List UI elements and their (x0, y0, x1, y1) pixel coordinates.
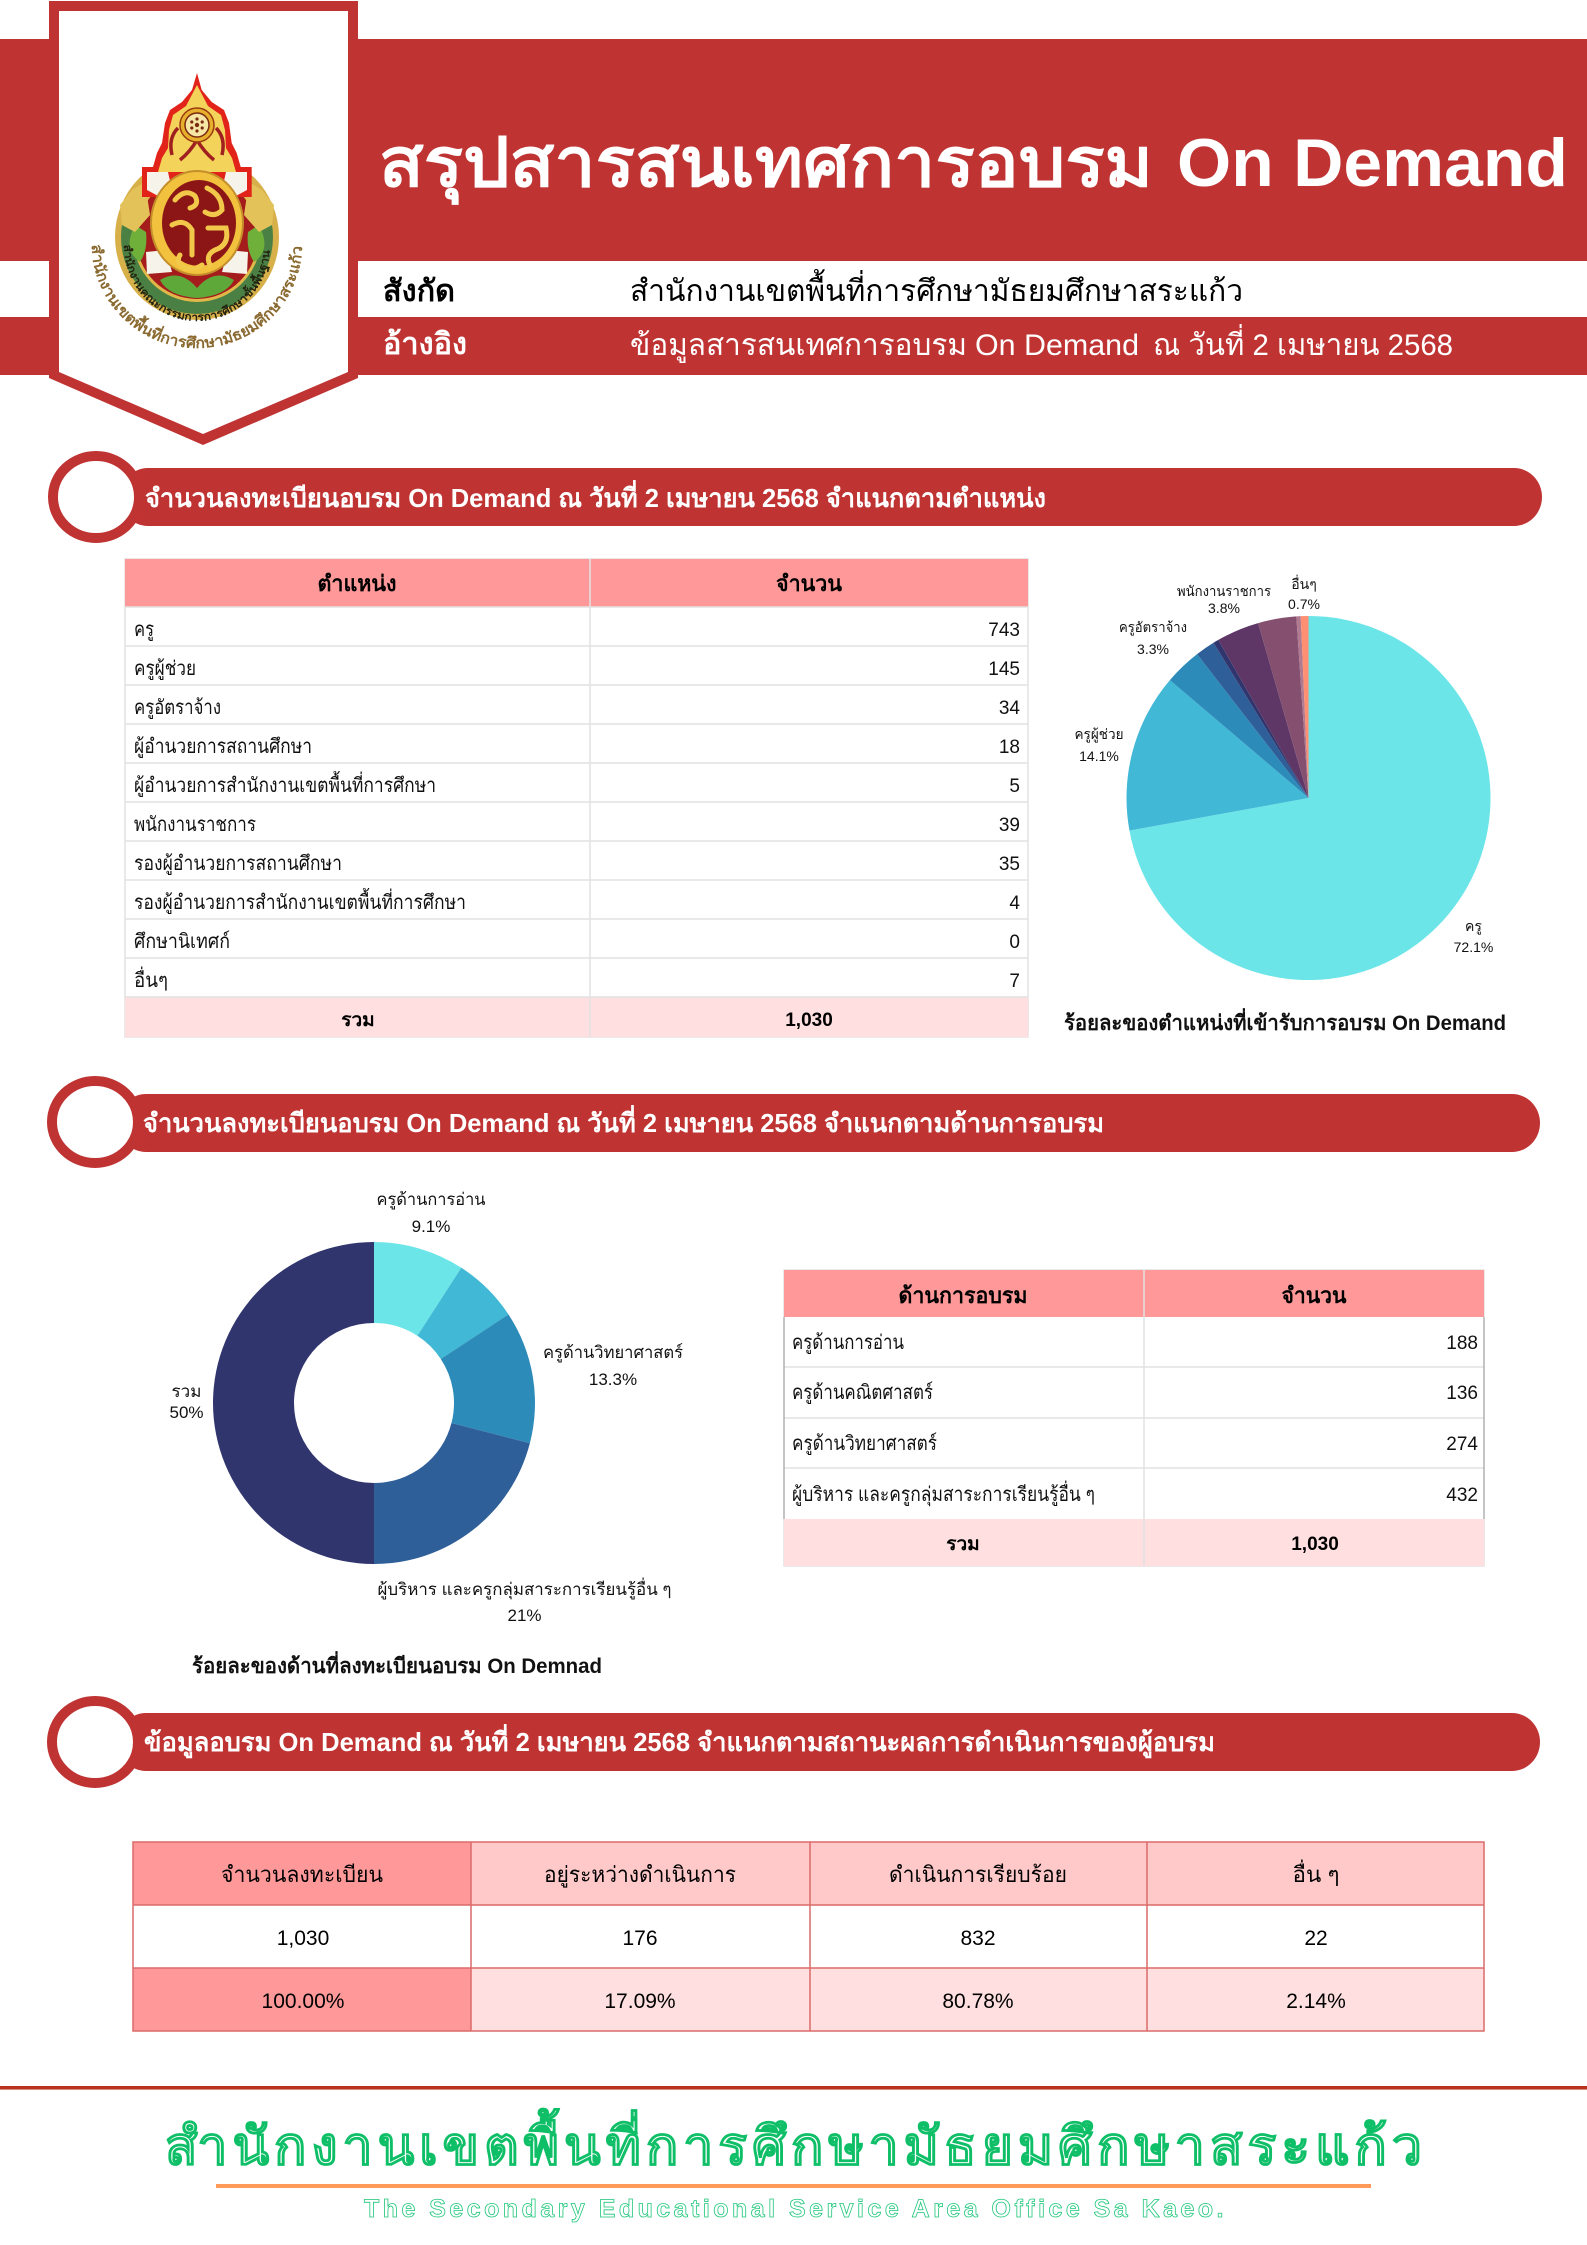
table: training status summary: 80.78% (942, 1990, 1014, 2013)
table: registrations by training area: ครูด้านการอ่าน (792, 1332, 904, 1355)
footer divider (216, 2184, 1371, 2188)
table: registrations by position: 39 (999, 815, 1020, 836)
table: training status summary: 1,030 (277, 1927, 329, 1950)
table: registrations by position: 35 (999, 854, 1020, 875)
pie chart: share by position: ครูผู้ช่วย (1074, 726, 1124, 743)
table: registrations by position: ผู้อำนวยการสถานศึกษา (134, 736, 312, 759)
table: registrations by training area: รวม (946, 1534, 980, 1555)
table: registrations by position: 34 (999, 698, 1020, 719)
donut chart: share by training area: ผู้บริหาร และครูกลุ่มสาระการเรียนรู้อื่น ๆ (378, 1577, 672, 1600)
table: registrations by position: รวม (341, 1010, 375, 1031)
donut chart caption: ร้อยละของด้านที่ลงทะเบียนอบรม On Demnad (192, 1650, 602, 1678)
subtitle: affiliation value: สำนักงานเขตพื้นที่การศึกษามัธยมศึกษาสระแก้ว (630, 269, 1243, 308)
table: registrations by position: ผู้อำนวยการสำนักงานเขตพื้นที่การศึกษา (134, 771, 436, 798)
pie chart: share by position: 0.7% (1288, 596, 1320, 612)
pie chart: share by position: อื่นๆ (1291, 575, 1317, 592)
table: registrations by position: ครูผู้ช่วย (134, 658, 196, 681)
icon: school emblem (92, 73, 302, 348)
table: registrations by position: 18 (999, 737, 1020, 758)
title: On Demand (1177, 125, 1568, 201)
footer: organisation name: สำนักงานเขตพื้นที่การศึกษามัธยมศึกษาสระแก้ว (165, 2108, 1427, 2176)
pie chart: share by position (1074, 575, 1493, 980)
table: registrations by position: 0 (1009, 932, 1020, 953)
table: registrations by position: 5 (1009, 776, 1020, 797)
pie chart: share by position: 3.8% (1208, 600, 1240, 616)
table: training status summary: 22 (1304, 1927, 1328, 1950)
table: registrations by position: ตำแหน่ง (318, 571, 396, 596)
table: registrations by training area: 1,030 (1291, 1534, 1339, 1555)
table: registrations by training area: 136 (1446, 1383, 1478, 1404)
table: training status summary (133, 1842, 1484, 2031)
donut chart: share by training area: 50% (169, 1403, 204, 1422)
subtitle: reference value: On Demand (975, 329, 1139, 362)
section header 2 (52, 1081, 1540, 1163)
table: registrations by position (125, 559, 1028, 1037)
table: registrations by position: พนักงานราชการ (134, 814, 256, 836)
table: registrations by position: ครูอัตราจ้าง (134, 697, 221, 720)
table: registrations by position: 743 (988, 620, 1020, 641)
table: registrations by position: 145 (988, 659, 1020, 680)
title (379, 125, 1568, 205)
table: training status summary: อยู่ระหว่างดำเนินการ (544, 1862, 736, 1888)
pie chart: share by position: 3.3% (1137, 641, 1169, 657)
icon: school emblem: สำนักงานคณะกรรมการการศึกษาขั้นพื้นฐาน (124, 245, 270, 322)
section header 3: ข้อมูลอบรม On Demand ณ วันที่ 2 เมษายน 2568 จำแนกตามสถานะผลการดำเนินการของผู้อบรม (144, 1723, 1215, 1759)
table: registrations by position: ศึกษานิเทศก์ (134, 930, 230, 953)
table: registrations by position: ครู (134, 619, 154, 642)
section header 1 (53, 456, 1542, 538)
table: training status summary: อื่น ๆ (1292, 1859, 1340, 1887)
pie chart caption: ร้อยละของตำแหน่งที่เข้ารับการอบรม On Demand (1064, 1007, 1506, 1035)
donut chart: share by training area: 21% (507, 1606, 542, 1625)
donut chart: share by training area: ครูด้านวิทยาศาสตร์ (543, 1343, 683, 1363)
table: registrations by training area: ครูด้านคณิตศาสตร์ (792, 1381, 933, 1405)
donut chart: share by training area: ครูด้านการอ่าน (376, 1190, 486, 1210)
pie chart: share by position: ครูอัตราจ้าง (1119, 619, 1187, 636)
table: registrations by training area: จำนวน (1282, 1283, 1346, 1308)
table: registrations by training area: ผู้บริหาร และครูกลุ่มสาระการเรียนรู้อื่น ๆ (792, 1480, 1095, 1507)
table: registrations by training area: 274 (1446, 1434, 1478, 1455)
table: registrations by training area: ด้านการอบรม (898, 1283, 1028, 1308)
donut chart: share by training area: 9.1% (412, 1217, 450, 1236)
table: registrations by position: รองผู้อำนวยการสำนักงานเขตพื้นที่การศึกษา (134, 888, 466, 915)
table: registrations by position: อื่นๆ (134, 966, 168, 992)
subtitle: reference value: ข้อมูลสารสนเทศการอบรม (630, 329, 967, 363)
donut chart: share by training area: 13.3% (589, 1370, 637, 1389)
table: training status summary: 2.14% (1286, 1990, 1346, 2013)
table: training status summary: 100.00% (262, 1990, 344, 2013)
header band (0, 39, 1587, 375)
pie chart: share by position: 72.1% (1454, 939, 1493, 955)
footer: English name: The Secondary Educational Service Area Office Sa Kaeo. (364, 2195, 1227, 2223)
table: registrations by training area: ครูด้านวิทยาศาสตร์ (792, 1432, 937, 1456)
subtitle: reference value: ณ วันที่ 2 เมษายน 2568 (1153, 324, 1453, 362)
table: training status summary: 176 (622, 1927, 658, 1950)
footer rule (0, 2086, 1587, 2090)
table: registrations by training area: 432 (1446, 1485, 1478, 1506)
table: registrations by position: จำนวน (776, 571, 842, 596)
table: training status summary: ดำเนินการเรียบร้อย (889, 1862, 1067, 1887)
pie chart: share by position: 14.1% (1079, 748, 1119, 764)
subtitle: reference label: อ้างอิง (383, 328, 467, 361)
section header 3 (52, 1701, 1540, 1783)
title: สรุปสารสนเทศการอบรม (379, 125, 1153, 205)
table: registrations by position: 1,030 (785, 1010, 833, 1031)
ribbon badge (49, 1, 358, 445)
subtitle: reference value (630, 324, 1453, 363)
subtitle: affiliation label: สังกัด (383, 275, 455, 308)
donut chart: share by training area (169, 1190, 683, 1625)
table: registrations by position: 7 (1009, 971, 1020, 992)
icon: school emblem: สำนักงานเขตพื้นที่การศึกษามัธยมศึกษาสระแก้ว (92, 244, 302, 348)
section header 2: จำนวนลงทะเบียนอบรม On Demand ณ วันที่ 2 เมษายน 2568 จำแนกตามด้านการอบรม (143, 1104, 1104, 1138)
table: registrations by position: รองผู้อำนวยการสถานศึกษา (134, 853, 342, 876)
table: training status summary: จำนวนลงทะเบียน (221, 1862, 383, 1887)
table: registrations by position: 4 (1009, 893, 1020, 914)
table: registrations by training area: 188 (1446, 1333, 1478, 1354)
table: registrations by training area (784, 1270, 1484, 1566)
table: training status summary: 832 (960, 1927, 996, 1950)
pie chart: share by position: พนักงานราชการ (1177, 583, 1271, 599)
pie chart: share by position: ครู (1465, 918, 1482, 935)
section header 1: จำนวนลงทะเบียนอบรม On Demand ณ วันที่ 2 เมษายน 2568 จำแนกตามตำแหน่ง (145, 479, 1046, 513)
donut chart: share by training area: รวม (172, 1382, 201, 1401)
table: training status summary: 17.09% (604, 1990, 676, 2013)
